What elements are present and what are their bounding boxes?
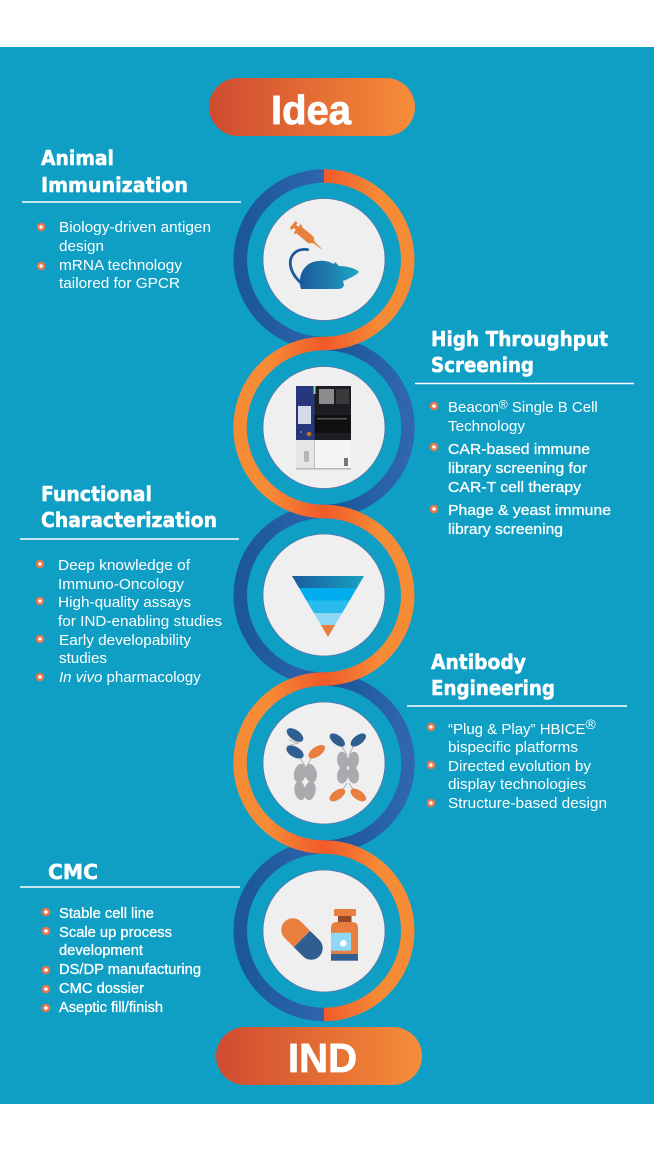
list text: display technologies [448,776,586,793]
end pill: IND: IND [288,1035,357,1081]
disc: antibody engineering [263,702,385,824]
heading: Animal Immunization: Animal [41,146,114,170]
list text: Single B Cell [508,399,598,416]
panel: CMC [20,860,240,1016]
bullet markers [427,723,435,807]
start pill: Idea: Idea [271,87,352,133]
panel: High Throughput Screening [415,327,634,538]
list text [448,716,607,812]
heading: Animal Immunization [41,146,188,197]
list text: Biology-driven antigen [59,219,211,236]
list text: ® [586,716,597,732]
bullet markers [430,402,438,513]
icon: syringe and mouse [289,220,359,289]
list text: studies [59,650,107,667]
list text [59,905,201,1016]
list text: for IND-enabling studies [58,613,222,630]
disc: functional characterization [263,534,385,656]
heading: CMC: CMC [48,860,98,884]
heading: Animal Immunization: Immunization [41,173,188,197]
list text: In vivo pharmacology [59,669,201,686]
list text: ® [499,398,508,412]
list text: Aseptic fill/finish [59,999,163,1016]
heading: Functional Characterization: Functional [41,482,152,506]
list text: High-quality assays [58,594,191,611]
list text: DS/DP manufacturing [59,961,201,978]
heading: Antibody Engineering: Antibody [431,650,526,674]
bullet markers [37,223,45,270]
panel: Animal Immunization [22,146,241,292]
list text: library screening for [448,460,587,477]
disc: high throughput screening [263,366,385,488]
list text: Technology [448,418,526,435]
list text: Deep knowledge of [58,557,191,574]
panel: Functional Characterization [20,482,239,686]
list text: bispecific platforms [448,739,578,756]
list text: Scale up process [59,924,172,941]
icon: Beacon instrument [296,386,351,470]
start pill: Idea [209,78,415,136]
bullet markers [36,560,44,681]
list text: development [59,942,144,959]
list text: mRNA technology [59,257,183,274]
list text: CAR-based immune [448,441,590,458]
list text [448,398,611,538]
list text: Beacon [448,399,499,416]
icon: capsule and vial [277,909,358,964]
list text: Stable cell line [59,905,154,922]
list text [59,219,211,292]
list text: Structure-based design [448,795,607,812]
list text: library screening [448,521,563,538]
disc: CMC [263,870,385,992]
list text: Early developability [59,632,191,649]
list text: Immuno-Oncology [58,576,184,593]
heading: Functional Characterization: Characterization [41,508,217,532]
list text: Directed evolution by [448,758,592,775]
list text: Phage & yeast immune [448,502,611,519]
heading: High Throughput Screening [431,327,608,377]
heading: High Throughput Screening: High Throughput [431,327,608,351]
icon: bispecific antibodies [284,725,368,804]
list text: CAR-T cell therapy [448,479,582,496]
intertwined helix rings [240,176,408,1014]
list text: tailored for GPCR [59,275,180,292]
heading: Functional Characterization [41,482,217,532]
list text: CMC dossier [59,980,144,997]
bullet markers [42,908,50,1012]
end pill: IND [216,1027,422,1085]
heading: High Throughput Screening: Screening [431,353,534,377]
disc: animal immunization [263,198,385,320]
list text [58,557,222,686]
list text: “Plug & Play” HBICE [448,721,586,738]
heading: Antibody Engineering: Engineering [431,676,555,700]
panel: Antibody Engineering [407,650,627,812]
icon: funnel [292,576,364,637]
list text: design [59,238,104,255]
heading: Antibody Engineering [431,650,555,700]
